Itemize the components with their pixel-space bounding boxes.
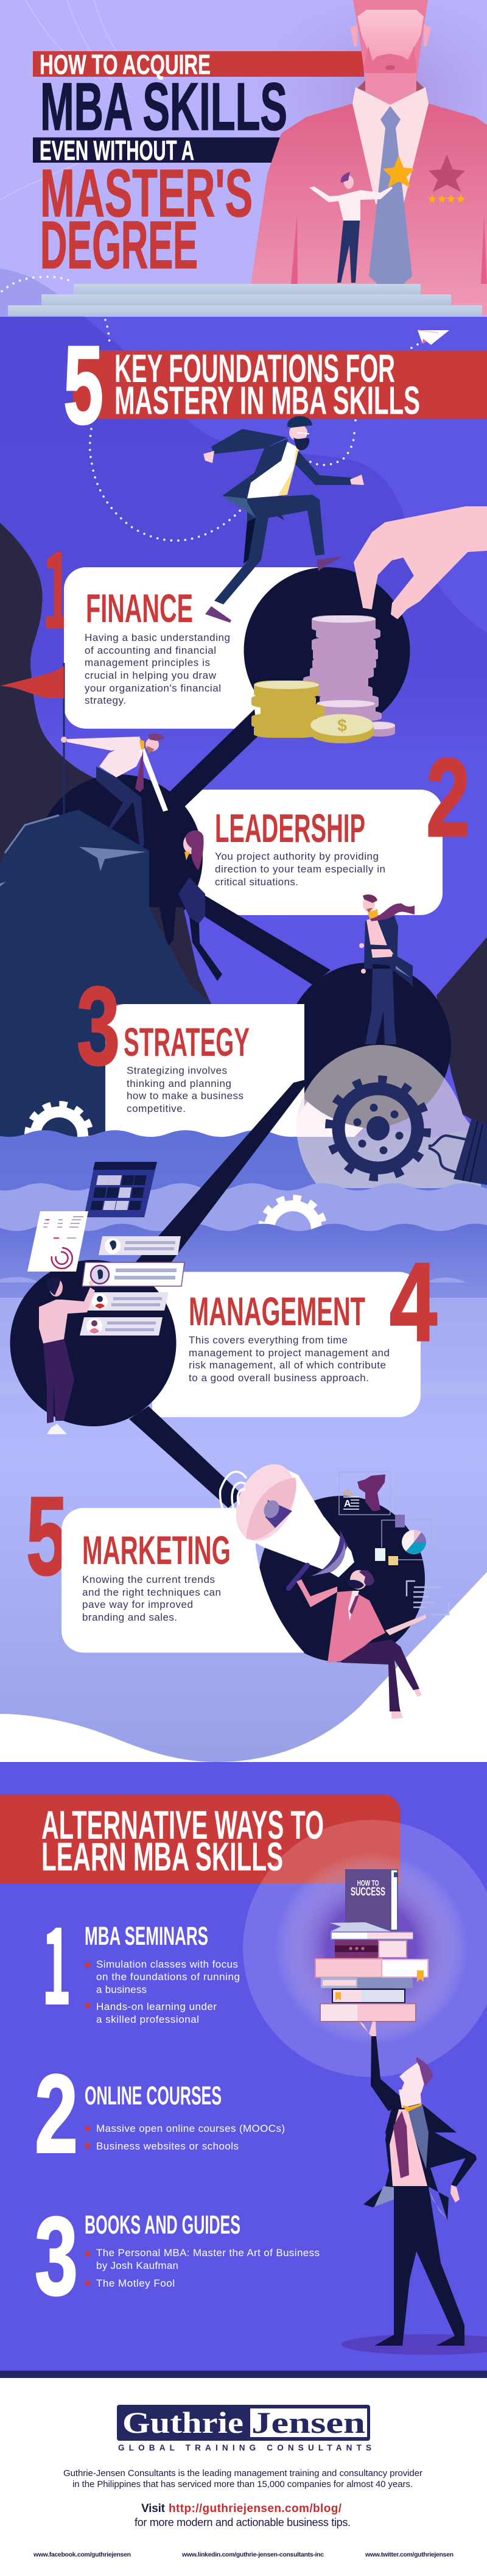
connector line 3-4	[91, 1078, 310, 1340]
navy rock	[0, 810, 211, 1139]
panel: leadership: direction to your team especially in	[215, 863, 385, 875]
block: books and guides: BOOKS AND GUIDES	[85, 2210, 240, 2240]
icon: giant hand	[354, 507, 487, 618]
circle 3	[286, 963, 451, 1128]
wave 2	[0, 1183, 487, 1237]
panel: management: management to project management and	[189, 1347, 390, 1359]
panel: finance: crucial in helping you draw	[85, 670, 217, 681]
marketing charts: A	[344, 1499, 351, 1509]
panel: marketing: branding and sales.	[82, 1612, 177, 1623]
call to action: http://guthriejensen.com/blog/	[169, 2502, 342, 2515]
panel: finance: Having a basic understanding	[85, 632, 230, 643]
halo circle	[243, 1820, 487, 2077]
block: MBA seminars: on the foundations of running	[96, 1971, 240, 1983]
stack of books	[315, 1869, 428, 2022]
circle 2	[36, 774, 203, 941]
company description	[63, 2468, 422, 2489]
call to action: Visit	[141, 2502, 166, 2515]
icon: coin stack, purple	[303, 615, 395, 737]
standing man on circle 3	[359, 894, 415, 1044]
panel: marketing: pave way for improved	[82, 1599, 193, 1610]
running businessman	[203, 416, 364, 623]
heading band: 5 key foundations: 5	[63, 322, 103, 447]
block: books and guides: The Motley Fool	[96, 2277, 175, 2289]
panel: finance: of accounting and financial	[85, 645, 216, 656]
text: 1	[41, 1881, 72, 2036]
block: MBA seminars: a business	[96, 1984, 147, 1995]
panel: strategy: STRATEGY	[124, 1019, 250, 1064]
climbing man	[61, 734, 168, 848]
connector line 4-5	[129, 1406, 244, 1508]
panel: marketing: MARKETING	[82, 1527, 231, 1573]
block: MBA seminars: Simulation classes with focus	[96, 1958, 238, 1970]
number 2: online: 2	[35, 2051, 78, 2176]
small man on the steps	[309, 172, 393, 283]
number 4: 4	[390, 1239, 437, 1364]
panel: finance: FINANCE	[86, 586, 193, 631]
lavender wave band	[0, 1383, 487, 1394]
panel: strategy: how to make a business	[127, 1090, 244, 1102]
icon: coin stack, gold: $	[337, 716, 347, 735]
icon: white gear on rock	[28, 1105, 90, 1167]
panel: marketing	[61, 1508, 304, 1652]
title bar: even without a: EVEN WITHOUT A	[40, 135, 194, 166]
profile card A	[99, 1236, 181, 1255]
icon: report sheet	[27, 1211, 88, 1272]
heading band: alternative ways	[0, 1794, 401, 1884]
giant businessman	[251, 0, 487, 316]
call to action	[135, 2502, 351, 2528]
block: books and guides: by Josh Kaufman	[96, 2260, 178, 2271]
logo: Guthrie Jensen: Guthrie	[122, 2405, 244, 2440]
block: MBA seminars	[85, 1922, 240, 2025]
wave 1	[0, 1130, 487, 1237]
panel: strategy: Strategizing involves	[127, 1065, 227, 1076]
block: MBA seminars: Hands-on learning under	[96, 2001, 217, 2012]
text: 1	[41, 506, 72, 660]
block: online courses: ONLINE COURSES	[85, 2081, 222, 2111]
social links: www.linkedin.com/guthrie-jensen-consultants-inc	[181, 2551, 324, 2558]
panel: strategy: competitive.	[127, 1103, 186, 1114]
panel: finance: management principles is	[85, 657, 210, 668]
panel: leadership	[181, 790, 443, 915]
block: MBA seminars: MBA SEMINARS	[85, 1922, 208, 1951]
social links: www.facebook.com/guthriejensen	[33, 2551, 131, 2558]
man at the board	[39, 1277, 95, 1434]
call to action: for more modern and actionable business tips.	[135, 2516, 351, 2528]
title: MBA skills: MBA SKILLS	[40, 69, 287, 144]
marketing charts	[339, 1472, 449, 1615]
block: online courses: Business websites or schools	[96, 2140, 239, 2152]
icon: lightbulb-dome	[296, 1045, 481, 1188]
climbing woman	[152, 830, 222, 981]
panel: strategy: thinking and planning	[127, 1078, 231, 1089]
panel: leadership: critical situations.	[215, 876, 298, 888]
panel: management: This covers everything from time	[189, 1334, 348, 1346]
businessman holding books	[342, 2022, 487, 2355]
profile card B	[82, 1262, 184, 1286]
section background: alternatives	[0, 1762, 487, 2371]
hero background	[0, 0, 487, 317]
icon: coin stack, gold	[251, 681, 374, 743]
number 3: 3	[77, 963, 120, 1088]
section background: key foundations	[0, 317, 487, 1231]
wave 4	[0, 1277, 466, 1283]
icon: white gear in waves	[262, 1198, 324, 1261]
seated man with megaphone	[296, 1570, 438, 1726]
panel: management	[152, 1272, 421, 1417]
panel: leadership: You project authority by providing	[215, 851, 379, 862]
panel: leadership: LEADERSHIP	[215, 805, 365, 851]
number 2: 2	[426, 735, 470, 860]
panel: management: risk management, all of which contribute	[189, 1359, 386, 1371]
block: online courses	[85, 2081, 285, 2152]
connector lines 1-2 and 2-3	[167, 709, 331, 985]
logo: Guthrie Jensen	[117, 2405, 371, 2452]
logo: Guthrie Jensen: Jensen	[251, 2405, 365, 2440]
circle 4	[10, 1260, 177, 1426]
block: books and guides	[85, 2210, 320, 2289]
logo: Guthrie Jensen: GLOBAL TRAINING CONSULTANTS	[118, 2443, 371, 2452]
block: MBA seminars: a skilled professional	[96, 2014, 199, 2025]
panel: marketing: and the right techniques can	[82, 1587, 221, 1598]
charcoal hill right	[436, 937, 487, 1127]
panel: management: MANAGEMENT	[189, 1289, 365, 1334]
icon: dark star with rating	[428, 155, 465, 203]
panel: finance: strategy.	[85, 695, 126, 706]
icon: calendar	[84, 1162, 157, 1217]
panel: strategy	[105, 1004, 304, 1145]
footer panel	[0, 2371, 487, 2576]
title: master's degree	[40, 156, 253, 283]
number 5: 5	[26, 1473, 68, 1598]
lavender background lower	[0, 1231, 487, 1762]
charcoal hill left	[0, 523, 134, 914]
stack of books: HOW TO	[357, 1878, 379, 1888]
icon: paper airplane	[418, 330, 449, 345]
panel: finance: your organization's financial	[85, 682, 221, 694]
title bar: how to acquire: HOW TO ACQUIRE	[40, 49, 211, 80]
circle 5	[259, 1496, 425, 1662]
heading band: alternative ways: LEARN MBA SKILLS	[41, 1834, 283, 1879]
dotted flight path	[2, 277, 420, 540]
wave 3	[0, 1223, 487, 1298]
icon: gold star	[383, 155, 415, 188]
number 3: books: 3	[35, 2193, 78, 2318]
block: online courses: Massive open online courses (MOOCs)	[96, 2123, 285, 2134]
title: master's degree: DEGREE	[40, 208, 198, 283]
social links	[33, 2551, 454, 2558]
icon: flag	[0, 663, 65, 815]
panel: finance	[64, 567, 344, 729]
heading band: 5 key foundations	[63, 322, 487, 447]
panel: management: to a good overall business approach.	[189, 1372, 369, 1384]
title: master's degree: MASTER'S	[40, 156, 253, 231]
steps	[8, 284, 482, 316]
icon: megaphone	[220, 1455, 354, 1588]
profile card C	[85, 1292, 169, 1311]
block: books and guides: The Personal MBA: Master the Art of Business	[96, 2247, 320, 2259]
circle 1	[244, 567, 410, 734]
company description: in the Philippines that has serviced more than 15,000 companies for almost 40 years.	[72, 2479, 413, 2489]
company description: Guthrie-Jensen Consultants is the leading management training and consultancy provider	[63, 2468, 422, 2479]
icon: large navy gear	[329, 1080, 487, 1185]
stack of books: SUCCESS	[351, 1886, 385, 1898]
social links: www.twitter.com/guthriejensen	[365, 2551, 454, 2558]
panel: marketing: Knowing the current trends	[82, 1574, 215, 1585]
profile card D	[80, 1317, 163, 1336]
